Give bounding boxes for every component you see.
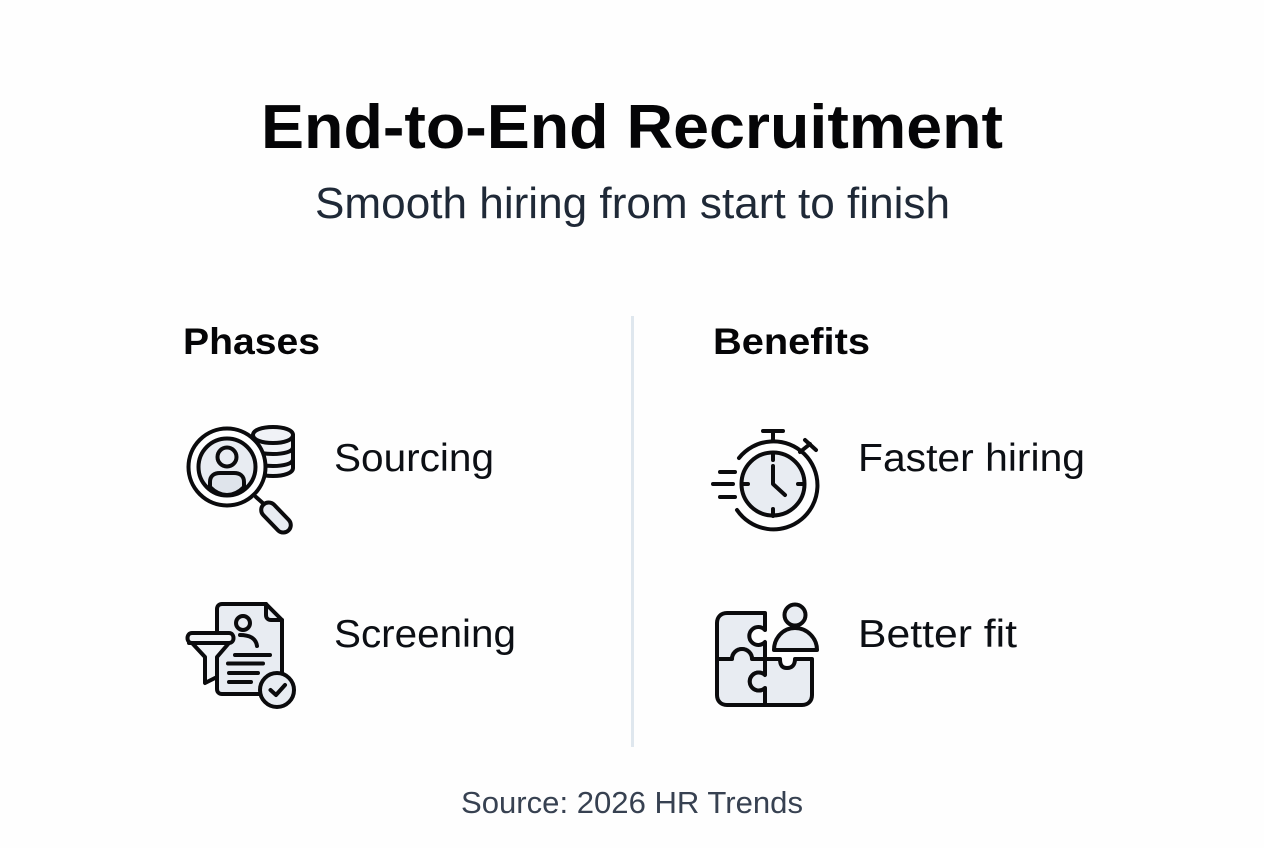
heading: phases: Phases xyxy=(183,321,320,362)
heading: benefits: Benefits xyxy=(713,321,870,362)
icon: stopwatch xyxy=(713,431,817,529)
icon: puzzle and person xyxy=(717,604,817,705)
panel: benefits xyxy=(713,321,1085,705)
label: faster hiring: Faster hiring xyxy=(858,437,1085,480)
source note: Source: 2026 HR Trends xyxy=(461,785,803,820)
title: End-to-End Recruitment xyxy=(261,93,1003,162)
label: better fit: Better fit xyxy=(858,613,1017,656)
subtitle: Smooth hiring from start to finish xyxy=(315,179,950,228)
label: sourcing: Sourcing xyxy=(334,437,494,480)
panel: phases xyxy=(183,321,516,707)
label: screening: Screening xyxy=(334,613,516,656)
icon: funnel and resume with check xyxy=(188,604,294,707)
icon: magnifier over person and database xyxy=(188,427,294,536)
